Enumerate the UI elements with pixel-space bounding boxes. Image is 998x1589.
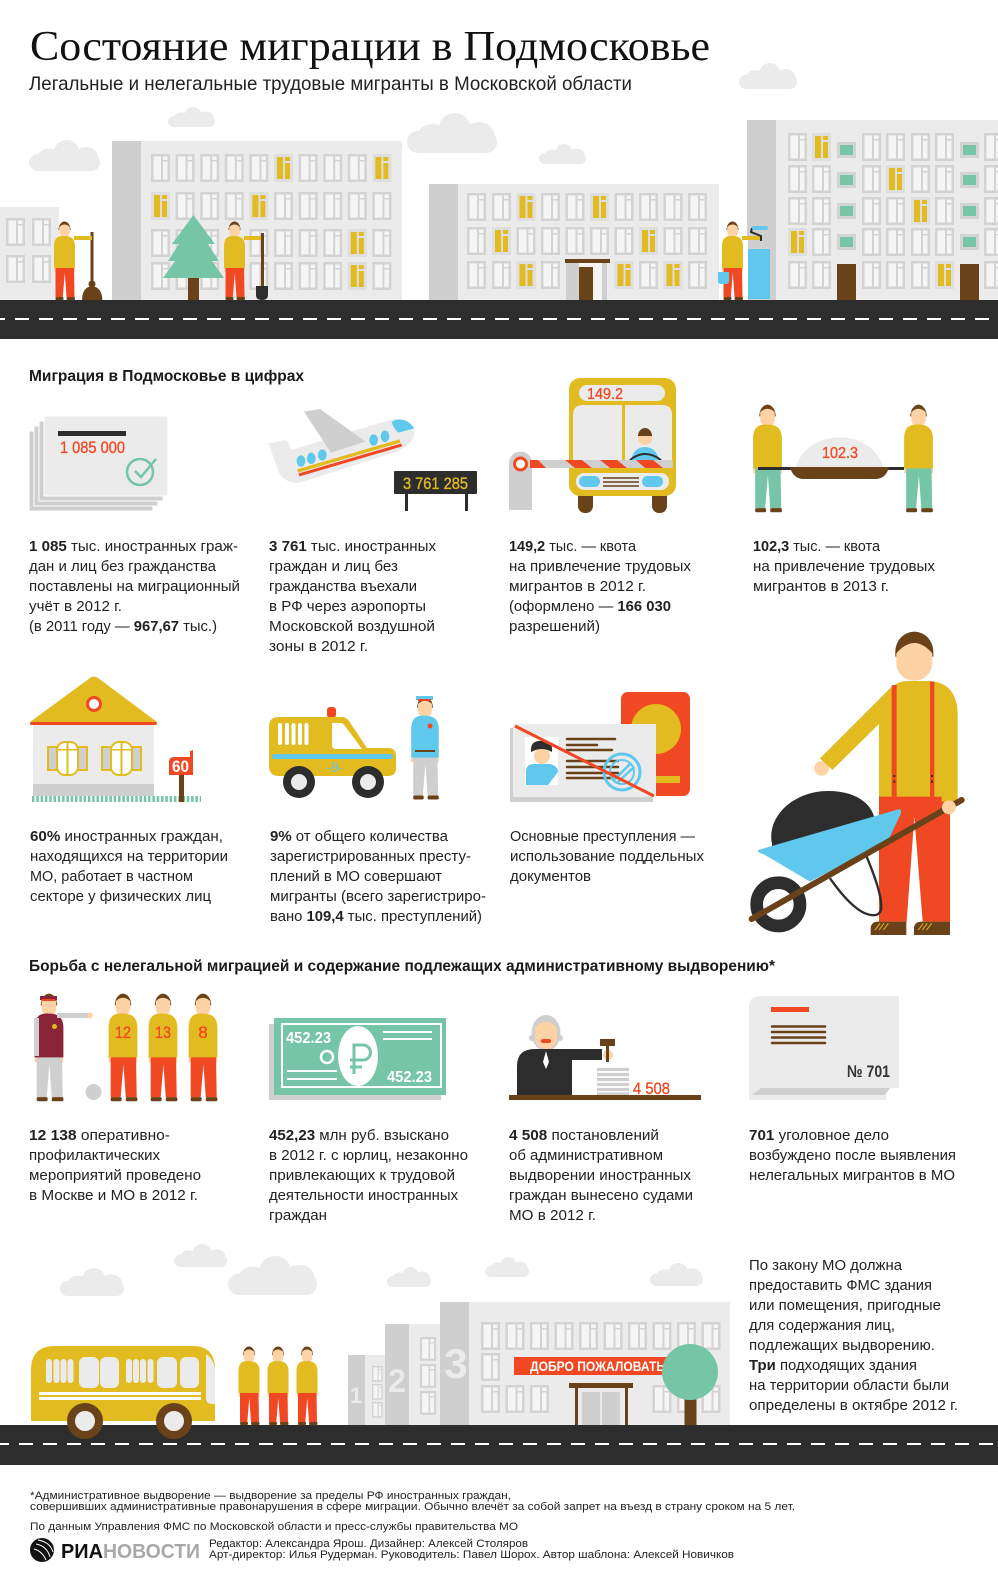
text: 2012 quota: на привлечение трудовых — [509, 558, 691, 575]
text: airports — [269, 538, 437, 655]
text: law on detention buildings: предоставить ФМС здания — [749, 1277, 932, 1294]
worker with broom — [54, 222, 102, 301]
text: law on detention buildings: определены в октябре 2012 г. — [749, 1397, 958, 1414]
icon: criminal case folder: № 701 — [847, 1062, 890, 1081]
title: Состояние миграции в Подмосковье — [30, 24, 710, 70]
worker with shovel — [224, 222, 268, 300]
text: fines: привлекающих к трудовой — [269, 1167, 455, 1184]
text: 2012 quota — [509, 538, 691, 635]
text: court rulings: граждан вынесено судами — [509, 1187, 693, 1204]
text: court rulings: 4 508 постановлений — [509, 1127, 659, 1144]
icon: airplane with sign: 3 761 285 — [403, 474, 468, 493]
icon: banknote: 452.23 — [286, 1030, 331, 1047]
icon: house with mailbox: 60 — [172, 757, 189, 776]
icon: guard and migrants: 12 — [115, 1023, 131, 1042]
text: fines — [269, 1127, 468, 1224]
icon: police van and officer — [269, 696, 439, 799]
text: criminal cases: 701 уголовное дело — [749, 1127, 889, 1144]
credits — [209, 1538, 734, 1561]
heading: migration in figures: Миграция в Подмосковье в цифрах — [29, 368, 304, 385]
icon: stack of papers — [29, 416, 168, 511]
head — [895, 632, 933, 681]
icon: forged documents — [510, 692, 690, 802]
sweater — [820, 681, 958, 802]
text: fines: граждан — [269, 1207, 327, 1224]
text: law on detention buildings: Три подходящих здания — [749, 1357, 917, 1374]
text: crimes: мигранты (всего зарегистриро- — [270, 888, 486, 905]
traffic light — [436, 231, 449, 301]
subtitle: Легальные и нелегальные трудовые мигранты в Московской области — [29, 73, 632, 95]
hand left — [814, 761, 829, 776]
wheelbarrow — [752, 791, 962, 926]
source: По данным Управления ФМС по Московской области и пресс-службы правительства МО — [30, 1521, 518, 1533]
text: airports: 3 761 тыс. иностранных — [269, 538, 437, 555]
text: court rulings: МО в 2012 г. — [509, 1207, 596, 1224]
detention building 3 — [440, 1302, 730, 1425]
icon: police van and officer: -9- — [326, 759, 344, 775]
shoes — [871, 922, 950, 935]
text: 2012 quota: (оформлено — 166 030 — [509, 598, 671, 615]
text: airports: зоны в 2012 г. — [269, 638, 368, 655]
logo: НОВОСТИ — [103, 1541, 200, 1563]
text: fines: 452,23 млн руб. взыскано — [269, 1127, 449, 1144]
text: law on detention buildings: для содержания лиц, — [749, 1317, 895, 1334]
footnote — [30, 1490, 795, 1513]
text: airports: граждан и лиц без — [269, 558, 398, 575]
building 3 — [747, 120, 998, 300]
school bus — [31, 1346, 215, 1435]
text: law on detention buildings — [749, 1257, 958, 1414]
text: law on detention buildings: По закону МО должна — [749, 1257, 903, 1274]
text: airports: гражданства въехали — [269, 578, 417, 595]
credits: Редактор: Александра Ярош. Дизайнер: Алексей Столяров — [209, 1538, 528, 1550]
icon: judge: 4 508 — [633, 1079, 670, 1098]
text: 2013 quota: на привлечение трудовых — [753, 558, 935, 575]
text: court rulings — [509, 1127, 693, 1224]
icon: two men carrying a dish — [753, 405, 933, 512]
text: private sector — [30, 828, 228, 905]
icon: guard and migrants: 13 — [155, 1023, 171, 1042]
heading: fight against illegal migration: Борьба с нелегальной миграцией и содержание подлежащих административному выдворению* — [29, 958, 776, 975]
text: main crimes — [510, 828, 704, 885]
building 2 — [429, 184, 719, 300]
building 1 — [112, 141, 402, 300]
text: airports: Московской воздушной — [269, 618, 435, 635]
icon: guard and migrants: 8 — [198, 1023, 208, 1042]
text: crimes: плений в МО совершают — [270, 868, 442, 885]
three migrants — [238, 1346, 318, 1425]
welcome sign: ДОБРО ПОЖАЛОВАТЬ — [530, 1358, 665, 1374]
big worker with wheelbarrow — [752, 632, 962, 935]
text: private sector: находящихся на территории — [30, 848, 228, 865]
text: law on detention buildings: на территории области были — [749, 1377, 949, 1394]
icon: bus at barrier: 149.2 — [587, 386, 623, 403]
text: registered migrants: 1 085 тыс. иностранных граж- — [29, 538, 238, 555]
text: 2012 quota: мигрантов в 2012 г. — [509, 578, 646, 595]
top street scene — [0, 63, 998, 339]
text: operations: в Москве и МО в 2012 г. — [29, 1187, 198, 1204]
text: crimes: 9% от общего количества — [270, 828, 449, 845]
icon: guard and migrants — [34, 994, 217, 1101]
text: main crimes: использование поддельных — [510, 848, 704, 865]
logo — [30, 1538, 200, 1563]
text: operations: мероприятий проведено — [29, 1167, 201, 1184]
icon: house with mailbox — [30, 676, 201, 802]
text: operations: профилактических — [29, 1147, 160, 1164]
text: registered migrants — [29, 538, 240, 635]
text: court rulings: об административном — [509, 1147, 663, 1164]
icon: airplane with sign — [268, 409, 477, 511]
text: 2012 quota: разрешений) — [509, 618, 600, 635]
text: 2013 quota — [753, 538, 935, 595]
icon: criminal case folder — [749, 996, 899, 1100]
text: private sector: 60% иностранных граждан, — [30, 828, 223, 845]
text: law on detention buildings: или помещения, пригодные — [749, 1297, 941, 1314]
text: criminal cases — [749, 1127, 956, 1184]
icon: banknote — [269, 1018, 446, 1100]
text: 2013 quota: мигрантов в 2013 г. — [753, 578, 889, 595]
suspenders — [892, 682, 934, 797]
road — [0, 1425, 998, 1465]
small building 1 — [348, 1355, 385, 1425]
text: fines: деятельности иностранных — [269, 1187, 458, 1204]
text: registered migrants: учёт в 2012 г. — [29, 598, 122, 615]
text: registered migrants: дан и лиц без гражданства — [29, 558, 217, 575]
text: 2012 quota: 149,2 тыс. — квота — [509, 538, 637, 555]
icon: banknote: 452.23 — [387, 1069, 432, 1086]
text: court rulings: выдворении иностранных — [509, 1167, 691, 1184]
small building 2 — [385, 1324, 440, 1425]
road — [0, 300, 998, 339]
painter — [718, 222, 770, 300]
small building 2: 2 — [388, 1363, 406, 1399]
clouds — [60, 1244, 703, 1296]
text: criminal cases: возбуждено после выявления — [749, 1147, 956, 1164]
porch — [565, 259, 610, 300]
text: private sector: секторе у физических лиц — [30, 888, 211, 905]
text: main crimes: Основные преступления — — [510, 828, 695, 845]
logo: РИА — [61, 1541, 103, 1563]
text: crimes: вано 109,4 тыс. преступлений) — [270, 908, 482, 925]
icon: bus at barrier — [509, 378, 676, 513]
credits: Арт-директор: Илья Рудерман. Руководитель: Павел Шорох. Автор шаблона: Алексей Новичков — [209, 1549, 734, 1561]
hand right — [942, 800, 956, 814]
footnote: совершивших административные правонарушения в сфере миграции. Обычно влечёт за собой запрет на въезд в страну сроком на 5 лет. — [30, 1501, 795, 1513]
text: fines: в 2012 г. с юрлиц, незаконно — [269, 1147, 468, 1164]
detention building 3: 3 — [444, 1340, 468, 1387]
text: criminal cases: нелегальных мигрантов в МО — [749, 1167, 955, 1184]
trousers — [879, 795, 950, 922]
text: main crimes: документов — [510, 868, 591, 885]
small building 1: 1 — [350, 1383, 362, 1408]
porch — [569, 1383, 633, 1427]
text: registered migrants: поставлены на миграционный — [29, 578, 240, 595]
icon: stack of papers: 1 085 000 — [60, 438, 125, 457]
footnote: *Административное выдворение — выдворение за пределы РФ иностранных граждан, — [30, 1490, 511, 1502]
text: registered migrants: (в 2011 году — 967,67 тыс.) — [29, 618, 217, 635]
icon: two men carrying a dish: 102.3 — [822, 445, 858, 462]
text: 2013 quota: 102,3 тыс. — квота — [753, 538, 881, 555]
icon: judge — [509, 1015, 701, 1100]
text: airports: в РФ через аэропорты — [269, 598, 426, 615]
text: operations — [29, 1127, 201, 1204]
text: private sector: МО, работает в частном — [30, 868, 193, 885]
text: law on detention buildings: подлежащих выдворению. — [749, 1337, 935, 1354]
text: crimes: зарегистрированных престу- — [270, 848, 471, 865]
fir tree — [163, 215, 224, 301]
tree — [662, 1344, 718, 1427]
building far left — [0, 207, 59, 300]
clouds — [29, 63, 797, 171]
text: crimes — [270, 828, 486, 925]
bottom street scene — [0, 1244, 998, 1465]
text: operations: 12 138 оперативно- — [29, 1127, 170, 1144]
